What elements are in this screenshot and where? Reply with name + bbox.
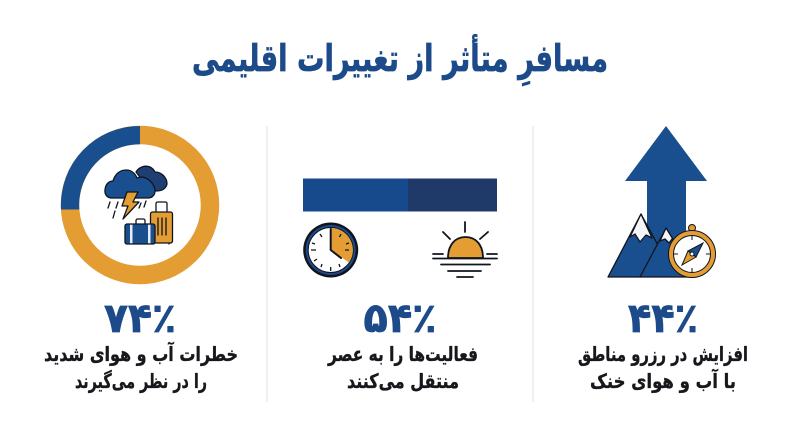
panel: shifting activities — [303, 178, 497, 393]
caption: cool destinations: با آب و هوای خنک — [590, 368, 736, 393]
icon: storm cloud and luggage — [105, 166, 172, 244]
caption: shifting activities — [327, 342, 478, 393]
panel: extreme weather — [44, 126, 238, 393]
caption: extreme weather — [44, 341, 238, 393]
icon: up arrow — [625, 126, 707, 277]
stat: 74 percent: ۷۴٪ — [104, 294, 176, 342]
title: مسافرِ متأثر از تغییرات اقلیمی — [192, 34, 608, 87]
stat: 54 percent: ۵۴٪ — [364, 294, 436, 342]
stat: 44 percent: ۴۴٪ — [628, 294, 698, 342]
icon: sun over horizon — [433, 222, 497, 277]
caption: shifting activities: فعالیت‌ها را به عصر — [327, 342, 478, 366]
bar chart — [303, 178, 497, 212]
icon: mountains — [608, 214, 695, 277]
caption: extreme weather: را در نظر می‌گیرند — [75, 369, 207, 393]
icon: compass — [668, 224, 716, 278]
caption: cool destinations — [578, 342, 748, 393]
panel: cool destinations — [578, 126, 748, 393]
caption: shifting activities: منتقل می‌کنند — [347, 369, 459, 393]
caption: extreme weather: خطرات آب و هوای شدید — [44, 341, 238, 366]
icon: clock — [303, 222, 358, 278]
donut chart — [61, 126, 210, 275]
